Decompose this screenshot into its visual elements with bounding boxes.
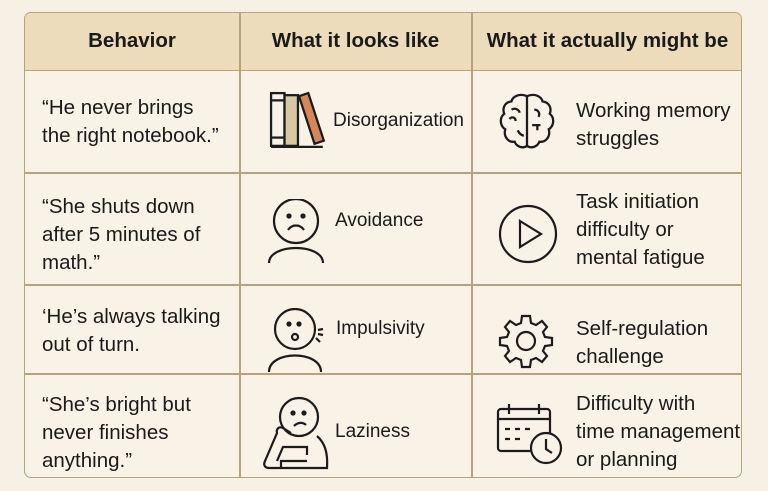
row4 answer: or planning [576, 448, 677, 471]
row4 behavior: “She’s bright but [42, 393, 191, 416]
row4 answer [576, 392, 740, 471]
label: laziness: Laziness [335, 421, 410, 442]
header: might be: What it actually might be [487, 29, 728, 52]
icon: talking face [268, 308, 324, 372]
row4 behavior [42, 393, 191, 472]
row3 behavior: out of turn. [42, 333, 140, 356]
row1 answer: struggles [576, 127, 659, 150]
row1 behavior: “He never brings [42, 96, 194, 119]
row3 behavior [42, 305, 221, 356]
row4 answer: time management [576, 420, 740, 443]
row4 behavior: anything.” [42, 449, 132, 472]
header row [25, 13, 741, 71]
row2 answer: mental fatigue [576, 246, 705, 269]
row4 answer: Difficulty with [576, 392, 695, 415]
row4 behavior: never finishes [42, 421, 168, 444]
row2 behavior [42, 195, 200, 274]
row2 answer [576, 190, 705, 269]
row2 answer: difficulty or [576, 218, 674, 241]
row2 behavior: “She shuts down [42, 195, 195, 218]
icon: gear [498, 314, 554, 368]
row3 answer [576, 317, 708, 368]
row3 answer: challenge [576, 345, 664, 368]
row2 answer: Task initiation [576, 190, 699, 213]
row1 behavior [42, 96, 219, 147]
header: behavior: Behavior [88, 29, 176, 52]
icon: play [498, 204, 558, 264]
label: disorganization: Disorganization [333, 110, 464, 131]
row3 behavior: ‘He’s always talking [42, 305, 221, 328]
icon: sad face [268, 199, 324, 263]
row3 answer: Self-regulation [576, 317, 708, 340]
row2 behavior: math.” [42, 251, 100, 274]
icon: brain [500, 94, 554, 148]
label: avoidance: Avoidance [335, 210, 423, 231]
row2 behavior: after 5 minutes of [42, 223, 200, 246]
row1 answer [576, 99, 731, 150]
icon: calendar clock [496, 404, 562, 464]
header: looks like: What it looks like [272, 29, 439, 52]
icon: thinking person [263, 396, 328, 470]
row1 answer: Working memory [576, 99, 731, 122]
label: impulsivity: Impulsivity [336, 318, 425, 339]
icon: books [270, 92, 326, 148]
row1 behavior: the right notebook.” [42, 124, 219, 147]
